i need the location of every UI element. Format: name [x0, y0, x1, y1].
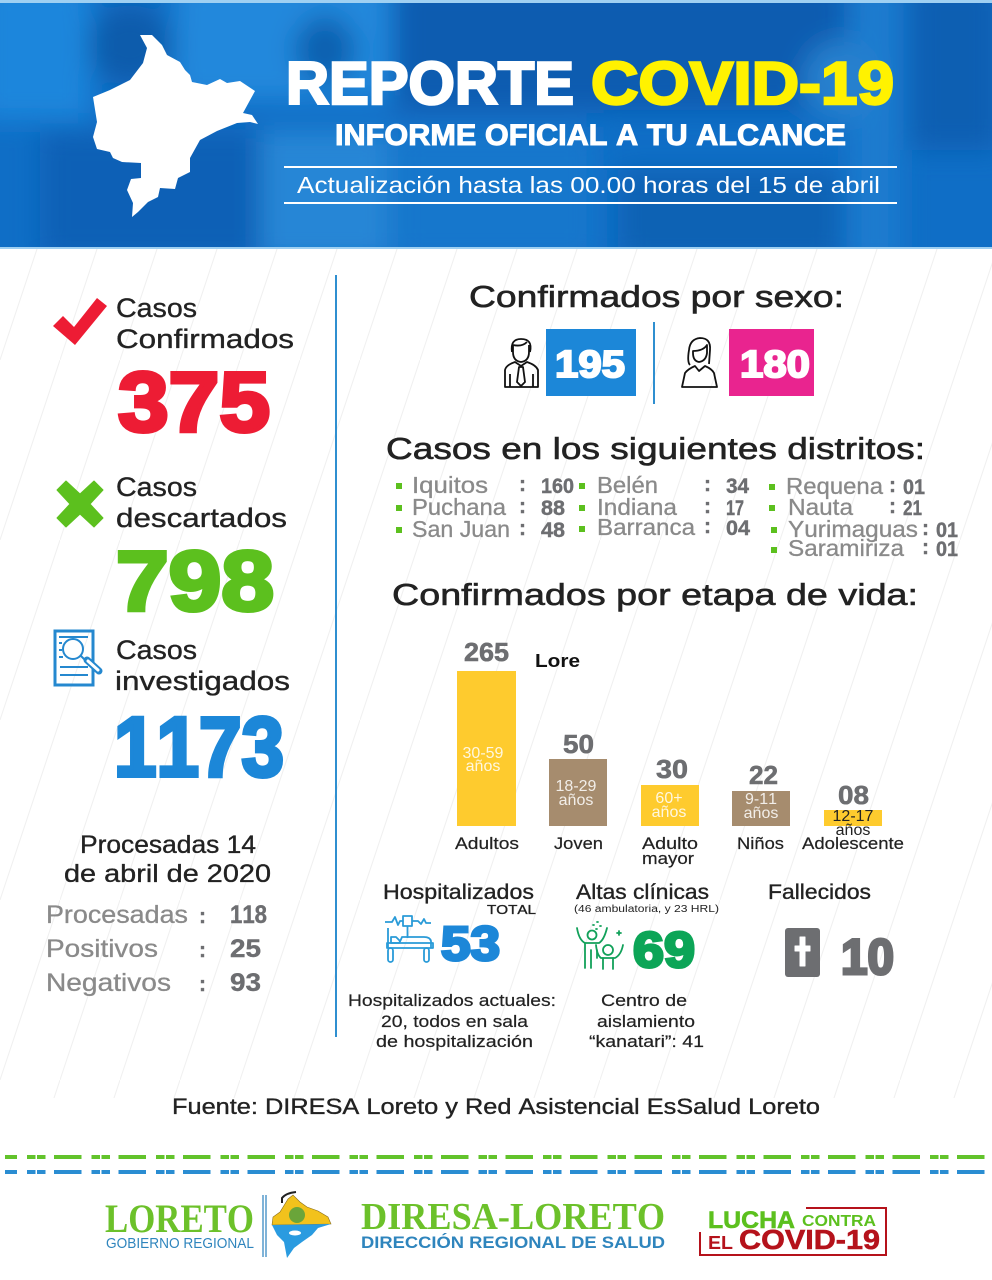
- district column 1: :: [519, 517, 526, 540]
- processed heading: Procesadas 14: [80, 831, 256, 859]
- logo: Loreto regional government: GOBIERNO REGIONAL: [106, 1235, 254, 1252]
- district column 3: :: [889, 495, 896, 518]
- bar: children: [732, 760, 790, 853]
- logo: DIRESA Loreto: DIRECCIÓN REGIONAL DE SALUD: [361, 1233, 665, 1252]
- district column 2: :: [704, 473, 711, 496]
- bar: older adult: [641, 754, 699, 868]
- logo: Lucha contra el COVID-19: CONTRA: [802, 1213, 876, 1230]
- hospitalized note: [348, 991, 556, 1051]
- map of Loreto: [93, 35, 258, 217]
- processed table: 118: [230, 901, 267, 929]
- bar: young: [549, 729, 607, 853]
- processed table: Positivos: [46, 935, 158, 963]
- district column 1: 48: [541, 519, 565, 542]
- discharges heading: Altas clínicas: [576, 881, 709, 904]
- district column 2: 04: [726, 517, 750, 540]
- male count: 195: [555, 344, 625, 386]
- district column 3: 01: [903, 476, 925, 499]
- district column 3: 01: [936, 538, 958, 561]
- update band: Actualización hasta las 00.00 horas del 15 de abril: [297, 172, 880, 198]
- confirmed label: Casos: [116, 293, 197, 323]
- bar: children: 22: [749, 760, 778, 790]
- discharges heading: [574, 881, 719, 915]
- investigated label: [115, 635, 290, 696]
- confirmed number: 375: [118, 355, 270, 449]
- processed table: 25: [230, 935, 261, 963]
- district column 3: Saramiriza: [788, 535, 904, 561]
- bar: older adult: años: [652, 804, 686, 821]
- logo: Loreto regional government: [105, 1192, 331, 1258]
- processed table: Negativos: [46, 969, 171, 997]
- bar: adults: 30-59: [463, 745, 504, 762]
- logo: DIRESA Loreto: DIRESA-LORETO: [361, 1196, 665, 1238]
- hospitalized number: 53: [441, 918, 500, 971]
- isolation note: [589, 991, 704, 1051]
- isolation note: “kanatari”: 41: [589, 1032, 704, 1051]
- hospitalized note: de hospitalización: [376, 1032, 533, 1051]
- logo: Loreto regional government: LORETO: [105, 1196, 254, 1241]
- discarded label: descartados: [116, 503, 287, 533]
- bar: teen: Adolescente: [802, 834, 904, 853]
- icon: recovered people: [577, 922, 623, 969]
- bar: children: 9-11: [745, 791, 777, 808]
- female count: [729, 329, 814, 396]
- bar: teen: 08: [838, 780, 869, 810]
- investigated label: Casos: [116, 635, 197, 665]
- district column 1: [412, 472, 574, 542]
- icon: regional emblem: [272, 1192, 331, 1258]
- bar chart: [455, 637, 904, 868]
- heading: life stage: Confirmados por etapa de vida:: [392, 577, 918, 612]
- district column 1: :: [519, 473, 526, 496]
- title: COVID-19: [591, 50, 894, 117]
- bar: older adult: mayor: [642, 849, 694, 868]
- district column 1: 160: [541, 475, 574, 498]
- investigated label: investigados: [115, 666, 290, 696]
- note: Lore: [535, 651, 580, 671]
- district column 3: :: [922, 517, 929, 540]
- hospitalized note: Hospitalizados actuales:: [348, 991, 556, 1010]
- panel: deaths: [768, 881, 894, 985]
- processed heading: de abril de 2020: [64, 860, 271, 888]
- district column 1: San Juan: [412, 516, 510, 542]
- district column 2: Barranca: [597, 514, 695, 540]
- icon: document search: [55, 631, 99, 685]
- processed table: :: [199, 939, 206, 962]
- processed table: 93: [230, 969, 261, 997]
- district column 3: :: [922, 536, 929, 559]
- hospitalized heading: Hospitalizados: [383, 881, 534, 904]
- title: REPORTE: [286, 50, 574, 117]
- discarded label: [116, 472, 287, 533]
- subtitle: INFORME OFICIAL A TU ALCANCE: [335, 119, 846, 152]
- source: Fuente: DIRESA Loreto y Red Asistencial EsSalud Loreto: [172, 1094, 820, 1119]
- icon: red check: [53, 298, 107, 345]
- icon: green cross: [57, 481, 103, 527]
- logo: Lucha contra el COVID-19: COVID-19: [739, 1224, 880, 1255]
- bar: children: Niños: [737, 834, 784, 853]
- district column 3: Yurimaguas: [788, 516, 918, 542]
- header banner: [0, 0, 992, 270]
- district column 3: 01: [936, 519, 958, 542]
- deaths number: 10: [841, 929, 894, 985]
- district column 3: :: [889, 474, 896, 497]
- isolation note: Centro de: [601, 991, 687, 1010]
- icon: man: [505, 339, 538, 387]
- logo: Lucha contra el COVID-19: [700, 1207, 886, 1255]
- processed table: Procesadas: [46, 901, 188, 929]
- panel: district list: [396, 472, 958, 561]
- bar: teen: años: [836, 822, 870, 839]
- confirmed label: Confirmados: [116, 324, 294, 354]
- panel: sex counts: [505, 322, 814, 404]
- district column 2: Indiana: [597, 494, 677, 520]
- district column 1: Puchana: [412, 494, 506, 520]
- panel: hospitalized: [348, 881, 556, 1051]
- panel: discharges: [574, 881, 719, 1051]
- bar: older adult: 30: [656, 754, 688, 784]
- heading: districts: Casos en los siguientes distritos:: [386, 431, 925, 466]
- investigated number: 1173: [114, 700, 284, 794]
- district column 1: 88: [541, 497, 565, 520]
- bar: adults: años: [466, 758, 500, 775]
- district column 2: Belén: [597, 472, 658, 498]
- bar: young: 18-29: [556, 778, 597, 795]
- district column 2: 17: [726, 497, 744, 520]
- district column 1: Iquitos: [412, 472, 488, 498]
- bar: adults: Adultos: [455, 834, 519, 853]
- processed table: [46, 901, 267, 997]
- district column 3: Nauta: [788, 494, 853, 520]
- district column 3: 21: [903, 497, 922, 520]
- processed heading: [64, 831, 271, 888]
- district column 2: [597, 472, 750, 540]
- processed table: :: [199, 905, 206, 928]
- icon: hospital bed: [385, 916, 433, 962]
- hospitalized heading: [383, 881, 536, 917]
- bar: adults: [455, 637, 519, 853]
- district column 2: :: [704, 515, 711, 538]
- panel: left totals: [46, 293, 294, 997]
- title: [286, 50, 894, 117]
- district column 1: :: [519, 495, 526, 518]
- hospitalized note: 20, todos en sala: [381, 1012, 529, 1031]
- bar: older adult: Adulto: [642, 834, 698, 853]
- logo: Lucha contra el COVID-19: LUCHA: [708, 1207, 795, 1234]
- icon: woman: [682, 338, 717, 387]
- bar: young: Joven: [554, 834, 603, 853]
- isolation note: aislamiento: [597, 1012, 695, 1031]
- discharges number: 69: [633, 922, 695, 978]
- bar: adults: 265: [464, 637, 509, 667]
- discharges heading: (46 ambulatoria, y 23 HRL): [574, 904, 719, 915]
- district column 3: Requena: [786, 473, 883, 499]
- bar: teen: [802, 780, 904, 853]
- logo: Lucha contra el COVID-19: EL: [708, 1233, 733, 1253]
- female count: 180: [740, 344, 810, 386]
- confirmed label: [116, 293, 294, 354]
- heading: confirmed by sex: Confirmados por sexo:: [469, 279, 844, 314]
- bar: older adult: 60+: [655, 790, 683, 807]
- discarded label: Casos: [116, 472, 197, 502]
- male count: [546, 329, 636, 396]
- icon: cross tablet: [785, 928, 820, 977]
- processed table: :: [199, 973, 206, 996]
- district column 2: 34: [726, 475, 749, 498]
- deaths heading: Fallecidos: [768, 881, 871, 904]
- district column 3: [786, 473, 958, 561]
- bar: young: 50: [563, 729, 594, 759]
- hospitalized heading: TOTAL: [487, 902, 536, 917]
- discarded number: 798: [116, 534, 274, 628]
- bar: children: años: [744, 805, 778, 822]
- bullets: [396, 483, 777, 553]
- district column 2: :: [704, 495, 711, 518]
- bar: teen: 12-17: [833, 808, 874, 825]
- panel divider: [335, 275, 337, 1037]
- bar: young: años: [559, 792, 593, 809]
